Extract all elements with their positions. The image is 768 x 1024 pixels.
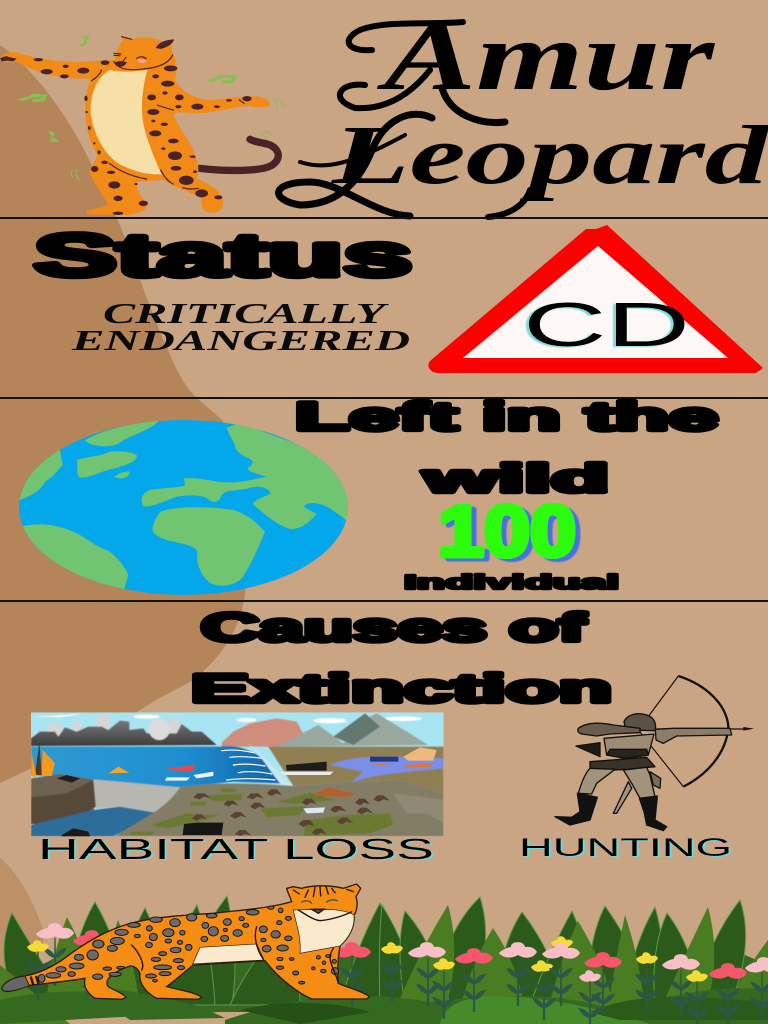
lighter leaves (0, 905, 768, 1024)
title line 2: Leopard (330, 109, 768, 202)
standing leopard tail tip (2, 976, 29, 991)
heading: left in the wild: Left in the (295, 395, 718, 439)
standing leopard body (2, 884, 369, 999)
label: hunting: HUNTING (519, 834, 732, 862)
motion marks (71, 98, 283, 179)
status text: critically endangered (70, 299, 410, 357)
leopard belly (91, 70, 162, 174)
background: lower dark patch (0, 858, 45, 995)
leopard spots (0, 56, 252, 215)
standing leopard spots (38, 906, 339, 984)
heading: left in the wild (295, 395, 718, 501)
leopard blush (138, 59, 146, 63)
title (279, 3, 768, 217)
bow and arrow (607, 676, 748, 787)
standing leopard chest (293, 909, 354, 953)
panel: left in the wild (13, 395, 718, 595)
music note 2 (207, 75, 237, 83)
leopard tail (200, 139, 278, 170)
standing leopard belly (193, 944, 264, 964)
leopard body (0, 36, 270, 215)
heading: causes of extinction: Causes of (201, 606, 586, 650)
heading: causes of extinction (191, 606, 612, 711)
label: habitat loss: HABITAT LOSS (38, 834, 434, 866)
title line 1: Amur (376, 3, 715, 111)
standing leopard tail bands (31, 976, 39, 985)
music note 3 (79, 35, 89, 47)
status text: critically endangered: ENDANGERED (70, 326, 410, 357)
music note 1 (17, 94, 47, 102)
heading: status: Status (34, 222, 412, 289)
music notes and motion marks (17, 35, 283, 179)
background: dark hill shape (0, 45, 246, 783)
leopard: standing realistic (2, 884, 369, 999)
archer figure (555, 714, 732, 831)
icon: globe (13, 420, 360, 595)
divider lines (0, 217, 768, 602)
triangle label CD: CD (523, 291, 690, 360)
title swashes (279, 22, 530, 217)
flowers (26, 923, 768, 1024)
dark leaves (4, 896, 746, 1010)
heading: causes of extinction: Extinction (191, 667, 612, 711)
icon: archer hunting (555, 676, 754, 831)
plants: back foliage (0, 896, 768, 1024)
illustration: habitat loss scene (31, 712, 444, 836)
icon: warning triangle (428, 225, 763, 373)
leopard: dancing cartoon (0, 36, 278, 215)
leopard face (92, 37, 244, 189)
music note 4 (48, 131, 59, 142)
heading: left in the wild: wild (422, 457, 609, 501)
label: individual: Individual (404, 572, 619, 594)
number: 100: 100 (438, 492, 576, 572)
panel: causes of extinction (31, 606, 754, 866)
panel: status (34, 222, 763, 373)
low leaves (0, 985, 768, 1024)
status text: critically endangered: CRITICALLY (103, 299, 390, 330)
foliage base mass (14, 955, 768, 1012)
standing leopard face (132, 887, 353, 983)
